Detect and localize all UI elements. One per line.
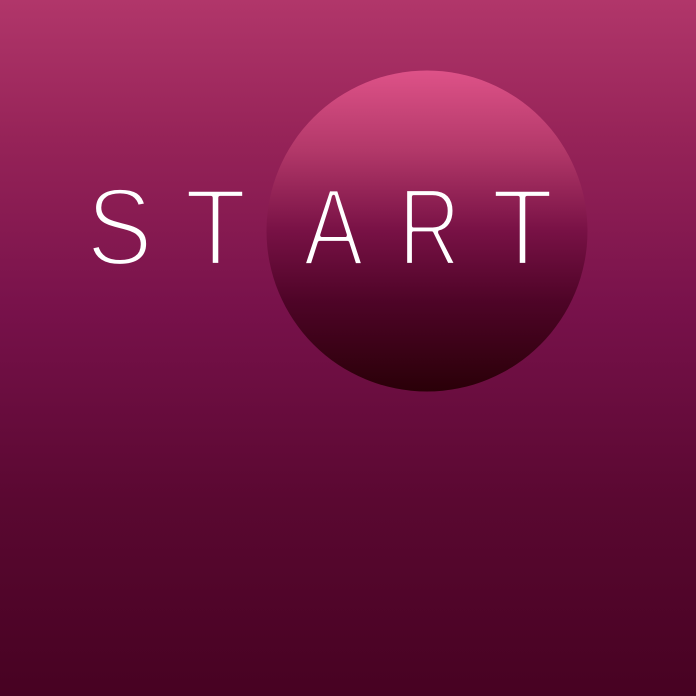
title: START: R	[399, 166, 460, 288]
title: START: S	[86, 166, 153, 289]
title: START: T	[492, 166, 553, 289]
title: START	[93, 190, 550, 264]
title: START: T	[185, 166, 246, 289]
gradient circle	[266, 70, 588, 392]
title: START: A	[303, 167, 364, 289]
